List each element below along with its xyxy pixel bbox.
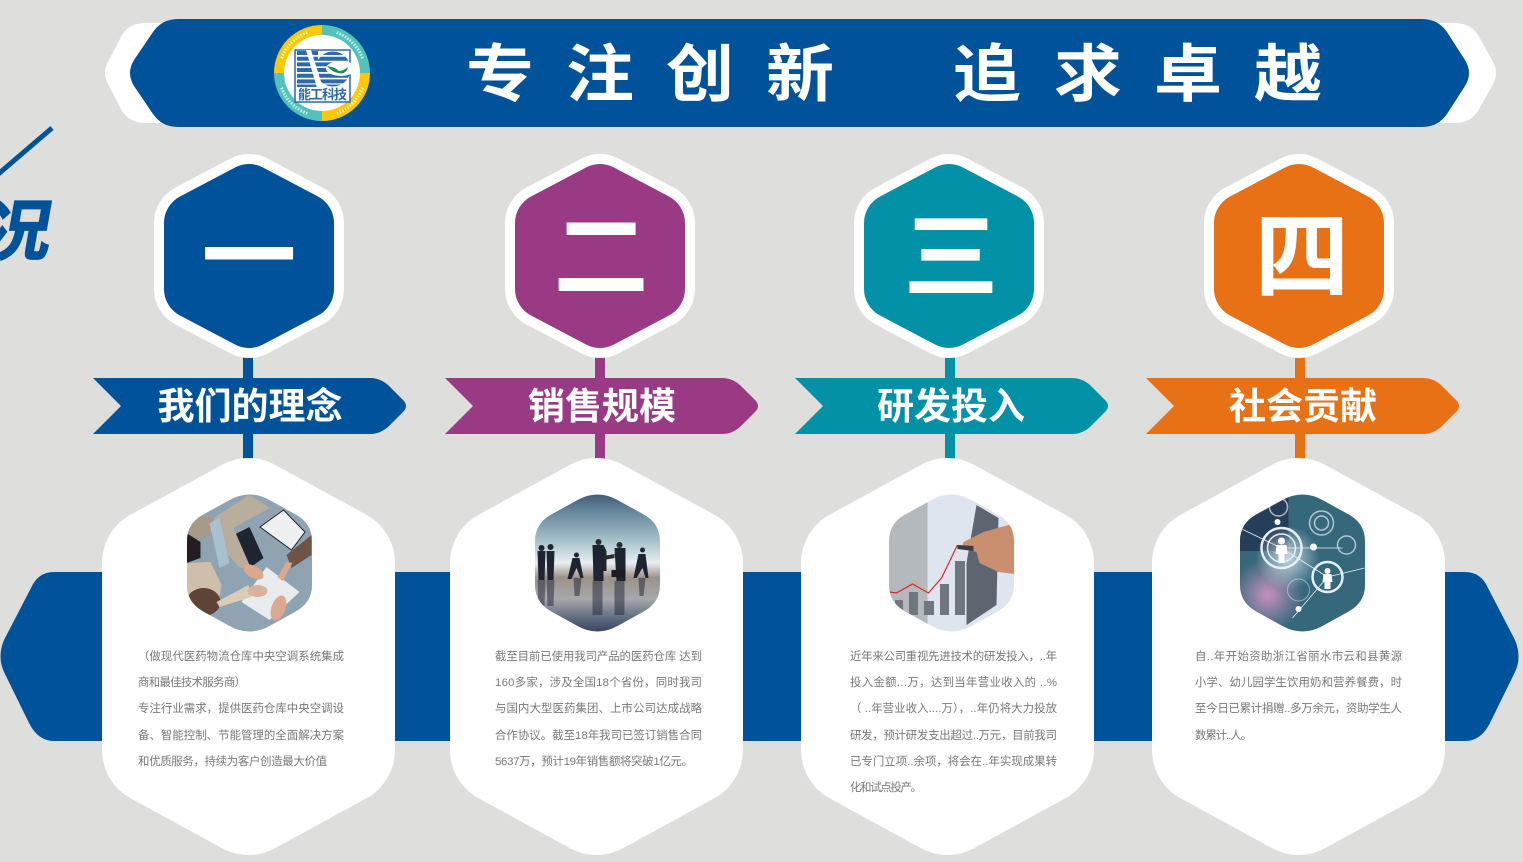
connector 1 [243,350,253,465]
text block 3: 研发，预计研发支出超过..万元，目前我司 [850,728,1057,742]
text block 1: （做现代医药物流仓库中央空调系统集成 [138,649,344,663]
text block 3: 投入金额...万，达到当年营业收入的 ..% [850,675,1057,689]
text block 2: 5637万，预计19年销售额将突破1亿元。 [495,754,693,768]
ribbon: 我们的理念 [93,378,406,434]
text block 4: 至今日已累计捐赠..多万余元，资助学生人 [1195,701,1402,715]
ribbon: 研发投入: 研发投入 [877,386,1025,427]
hexagon: 三: 三 [903,205,999,311]
column 4: 社会贡献 [1146,194,1459,800]
text block 2 [495,649,703,768]
connector 3 [945,350,955,465]
text block 4: 小学、幼儿园学生饮用奶和营养餐费，时 [1195,675,1402,689]
lower blue band [0,572,1518,741]
header banner [105,19,1496,127]
ribbon: 我们的理念: 我们的理念 [158,386,342,427]
connector 4 [1295,350,1305,465]
ribbon: 销售规模: 销售规模 [528,386,676,427]
cropped heading fragment [0,128,58,269]
hexagon: 一: 一 [201,205,297,311]
header slogan: 专注创新追求卓越 [466,39,1322,109]
text block 3: 已专门立项..余项，将会在..年实现成果转 [850,754,1057,768]
connector 2 [595,350,605,465]
text block 3: （ ..年营业收入....万），..年仍将大力投放 [850,701,1058,715]
text block 2: 与国内大型医药集团、上市公司达成战略 [495,701,703,715]
card 3 [850,491,1058,800]
text block 4: 自..年开始资助浙江省丽水市云和县黄源 [1195,649,1403,663]
ribbon: 社会贡献: 社会贡献 [1229,386,1377,427]
card 1 [138,491,345,800]
card 2 [495,491,703,800]
photo: handshake [534,491,662,635]
photo: rising chart [888,491,1016,635]
column 1: 我们的理念 [93,194,406,800]
ribbon: 销售规模 [445,378,758,434]
text block 4 [1195,649,1403,742]
hexagon: 四: 四 [1254,205,1350,311]
photo: network [1240,494,1365,632]
ribbon: 研发投入 [795,378,1108,434]
photo: meeting [186,491,314,635]
text block 3 [850,649,1058,794]
card 4 [1195,491,1403,800]
column 2: 销售规模 [445,194,758,800]
column 3: 研发投入 [795,194,1108,800]
text block 2: 合作协议。截至18年我司已签订销售合同 [495,728,702,742]
text block 1 [138,649,345,768]
text block 1: 专注行业需求，提供医药仓库中央空调设 [138,701,344,715]
text block 2: 160多家，涉及全国18个省份，同时我司 [495,675,702,689]
text block 3: 化和试点投产。 [850,780,922,794]
text block 1: 和优质服务，持续为客户创造最大价值 [138,754,327,768]
text block 4: 数累计..人。 [1195,728,1252,742]
text block 1: 商和最佳技术服务商） [138,675,246,689]
logo: 能工科技 [298,87,347,102]
text block 1: 备、智能控制、节能管理的全面解决方案 [138,728,345,742]
logo [274,25,370,121]
ribbon: 社会贡献 [1146,378,1459,434]
hexagon: 二: 二 [553,205,649,311]
text block 2: 截至目前已使用我司产品的医药仓库 达到 [495,649,702,663]
text block 3: 近年来公司重视先进技术的研发投入，..年 [850,649,1057,663]
